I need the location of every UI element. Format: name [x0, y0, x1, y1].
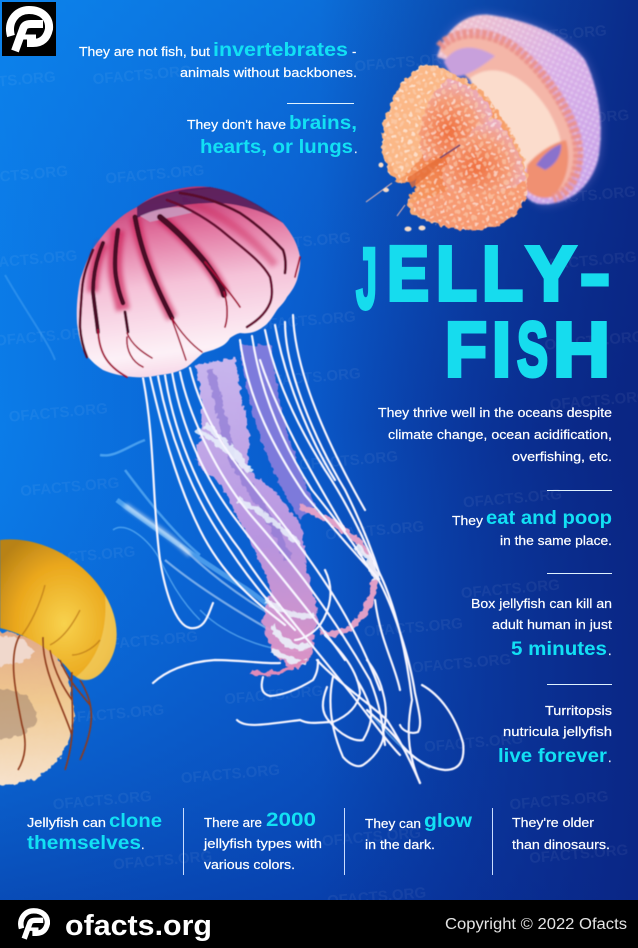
fact: dinosaurs: They're older	[512, 815, 595, 830]
footer site name: ofacts.org	[65, 910, 212, 942]
title: L	[482, 231, 523, 317]
watermark pattern: OFACTS.ORG	[113, 848, 213, 873]
text block: box jellyfish: 5 minutes	[511, 639, 607, 660]
text block: turritopsis: nutricula jellyfish	[503, 724, 612, 739]
fact: glow: glow	[424, 811, 472, 832]
rim band	[440, 34, 578, 198]
watermark pattern: OFACTS.ORG	[507, 22, 607, 48]
watermark pattern: OFACTS.ORG	[325, 518, 425, 544]
fact: glow	[365, 811, 472, 852]
logo: top left	[2, 2, 56, 56]
text block: invertebrates: animals without backbones.	[180, 65, 357, 80]
title: Y	[526, 231, 576, 317]
fact: 2000 types: various colors.	[204, 857, 295, 872]
bright streak	[125, 505, 190, 555]
title: J	[356, 231, 377, 327]
text block: invertebrates: invertebrates	[213, 40, 348, 61]
watermark pattern: OFACTS.ORG	[256, 308, 356, 334]
watermark pattern: OFACTS.ORG	[460, 576, 560, 602]
text block: turritopsis	[498, 703, 613, 767]
watermark pattern: OFACTS.ORG	[530, 107, 630, 132]
watermark pattern: OFACTS.ORG	[536, 183, 637, 209]
text block: turritopsis: live forever	[498, 746, 608, 767]
title: S	[517, 307, 548, 393]
watermark pattern: OFACTS.ORG	[52, 788, 152, 813]
dark crown	[137, 187, 283, 223]
oral arm mass	[382, 65, 528, 230]
small tentacles	[366, 145, 460, 232]
footer logo	[21, 911, 47, 939]
fact: 2000 types: jellyfish types with	[203, 836, 322, 851]
text block: box jellyfish: adult human in just	[492, 617, 612, 632]
tentacles	[143, 315, 463, 783]
ghost tentacles	[5, 275, 430, 768]
text block: thrive: overfishing, etc.	[512, 449, 612, 464]
footer	[0, 900, 638, 948]
illustration: top right jellyfish	[366, 15, 601, 232]
text block: thrive	[378, 405, 612, 464]
text block: turritopsis: Turritopsis	[545, 703, 613, 718]
fact: clone: Jellyfish can	[27, 815, 106, 830]
text block: eat and poop	[452, 508, 612, 548]
title: I	[492, 307, 511, 393]
watermark pattern: OFACTS.ORG	[423, 730, 524, 756]
watermark pattern: OFACTS.ORG	[537, 249, 637, 274]
text block: eat and poop: eat and poop	[486, 508, 612, 529]
text block: thrive: climate change, ocean acidification,	[388, 427, 612, 442]
watermark pattern: OFACTS.ORG	[36, 543, 136, 569]
text block: brains hearts lungs: .	[354, 141, 358, 156]
watermark pattern: OFACTS.ORG	[412, 651, 512, 677]
copyright: Copyright © 2022 Ofacts	[445, 916, 627, 933]
watermark pattern: OFACTS.ORG	[363, 615, 463, 641]
text block: thrive: They thrive well in the oceans despite	[378, 405, 612, 420]
title: F	[445, 307, 487, 393]
text block: brains hearts lungs: They don't have	[187, 117, 286, 132]
watermark pattern: OFACTS.ORG	[298, 448, 399, 474]
title	[356, 231, 610, 393]
text block: box jellyfish: Box jellyfish can kill an	[471, 596, 612, 611]
watermark pattern: OFACTS.ORG	[529, 842, 629, 867]
outer glow	[437, 15, 601, 204]
stripes	[80, 193, 300, 377]
inner dome	[440, 35, 578, 197]
fact: 2000 types: 2000	[266, 810, 316, 831]
fact: glow: in the dark.	[365, 837, 435, 852]
title: H	[553, 307, 610, 393]
watermark pattern: OFACTS.ORG	[251, 229, 351, 255]
fact: clone: themselves	[27, 833, 141, 854]
watermark pattern: OFACTS.ORG	[105, 162, 205, 187]
fact: dinosaurs	[512, 815, 610, 852]
watermark pattern: OFACTS.ORG	[509, 788, 609, 814]
watermark pattern: OFACTS.ORG	[8, 400, 108, 426]
illustration: yellow jellyfish at left	[0, 539, 117, 784]
bell	[77, 186, 300, 377]
text block: brains hearts lungs: hearts, or lungs	[200, 137, 353, 158]
fact: clone: .	[141, 837, 145, 852]
watermark pattern: OFACTS.ORG	[92, 63, 192, 88]
watermark pattern: OFACTS.ORG	[462, 486, 563, 512]
title: E	[387, 231, 429, 317]
text block: eat and poop: in the same place.	[500, 533, 612, 548]
title: L	[436, 231, 477, 317]
text block: box jellyfish	[471, 596, 612, 660]
text block: brains hearts lungs: brains,	[289, 113, 357, 134]
fact: clone	[27, 811, 162, 854]
fact: dinosaurs: than dinosaurs.	[512, 837, 610, 852]
watermark pattern: OFACTS.ORG	[98, 628, 199, 654]
text block: brains hearts lungs	[187, 113, 358, 158]
watermark pattern: OFACTS.ORG	[20, 474, 120, 500]
rim	[437, 15, 601, 204]
text block: eat and poop: They	[452, 513, 484, 528]
text block: invertebrates	[79, 40, 357, 80]
text block: invertebrates: They are not fish, but	[79, 44, 210, 59]
fact: 2000 types: There are	[204, 815, 262, 830]
fact: glow: They can	[365, 816, 421, 831]
watermark pattern: OFACTS.ORG	[261, 365, 361, 391]
fact: clone: clone	[109, 811, 162, 832]
red shading near stripes	[93, 200, 275, 318]
title: -	[580, 231, 610, 317]
oral arms	[195, 345, 376, 674]
watermark pattern: OFACTS.ORG	[327, 884, 427, 910]
fact: 2000 types	[203, 810, 322, 872]
watermark pattern: OFACTS.ORG	[354, 50, 454, 75]
illustration: main pink jellyfish	[5, 186, 463, 783]
watermark pattern: OFACTS.ORG	[65, 701, 165, 727]
watermark pattern: OFACTS.ORG	[180, 762, 281, 787]
text block: turritopsis: .	[608, 750, 612, 765]
watermark pattern: OFACTS.ORG	[224, 683, 324, 708]
text block: invertebrates: -	[352, 44, 356, 59]
watermark pattern: OFACTS.ORG	[321, 825, 422, 850]
text block: box jellyfish: .	[608, 643, 612, 658]
